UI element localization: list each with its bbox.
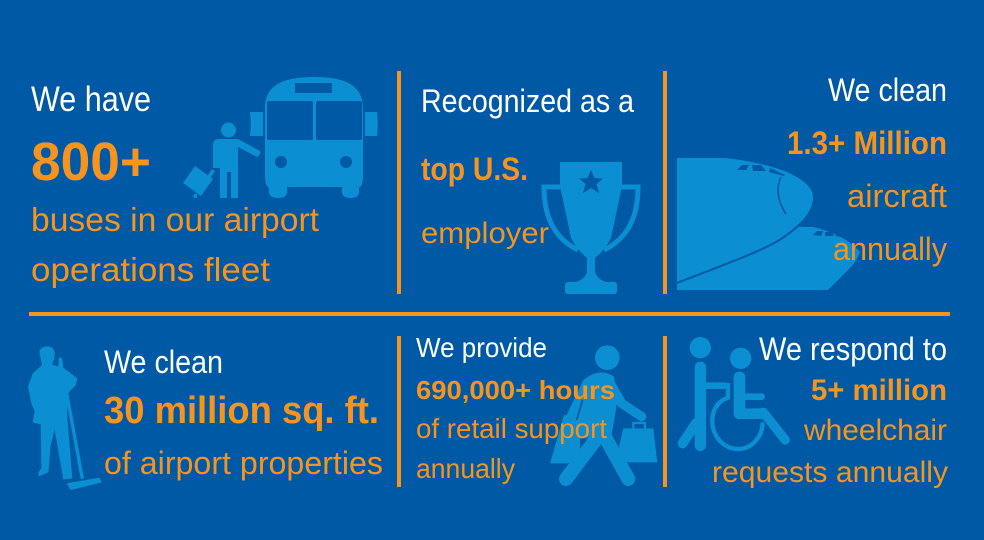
panel: wheelchair requests [683,331,948,489]
text: of retail support: of retail support [416,413,607,444]
text: buses in our airport: buses in our airport [31,201,319,238]
text: annually: annually [833,231,947,267]
heading: we have: We have [31,80,151,119]
heading: recognized as a: Recognized as a [421,83,634,119]
icon: wheelchair and attendant [683,337,785,451]
text: top U.S.: top U.S. [421,151,528,187]
text: operations fleet: operations fleet [31,251,270,288]
heading: we clean: We clean [828,72,947,108]
text: of airport properties: of airport properties [104,445,383,481]
number: 800+: 800+ [31,132,151,192]
panel: bus fleet [31,77,378,288]
number: 5+ million: 5+ million [811,374,947,407]
icon: bus and traveller [183,77,378,198]
icon: cleaner with mop [28,346,102,490]
heading: we respond to: We respond to [759,331,947,367]
icon: shopper with bags [550,345,657,479]
text: employer: employer [421,217,549,250]
text: wheelchair: wheelchair [803,414,947,447]
panel: retail support [416,332,657,484]
number: 30 million sq. ft.: 30 million sq. ft. [104,390,379,432]
number: 1.3+ million: 1.3+ Million [787,125,947,161]
heading: we provide: We provide [416,332,547,363]
icon: trophy [544,162,638,294]
text: requests annually: requests annually [712,456,948,489]
panel: top employer [421,83,638,294]
panel: airport properties [28,344,383,490]
heading: we clean: We clean [104,344,223,380]
number: 690,000+ hours: 690,000+ hours [416,375,615,405]
text: annually: annually [416,453,515,484]
panel: aircraft cleaning [677,72,947,290]
text: aircraft: aircraft [847,178,947,214]
icon: aircraft noses [677,158,860,290]
